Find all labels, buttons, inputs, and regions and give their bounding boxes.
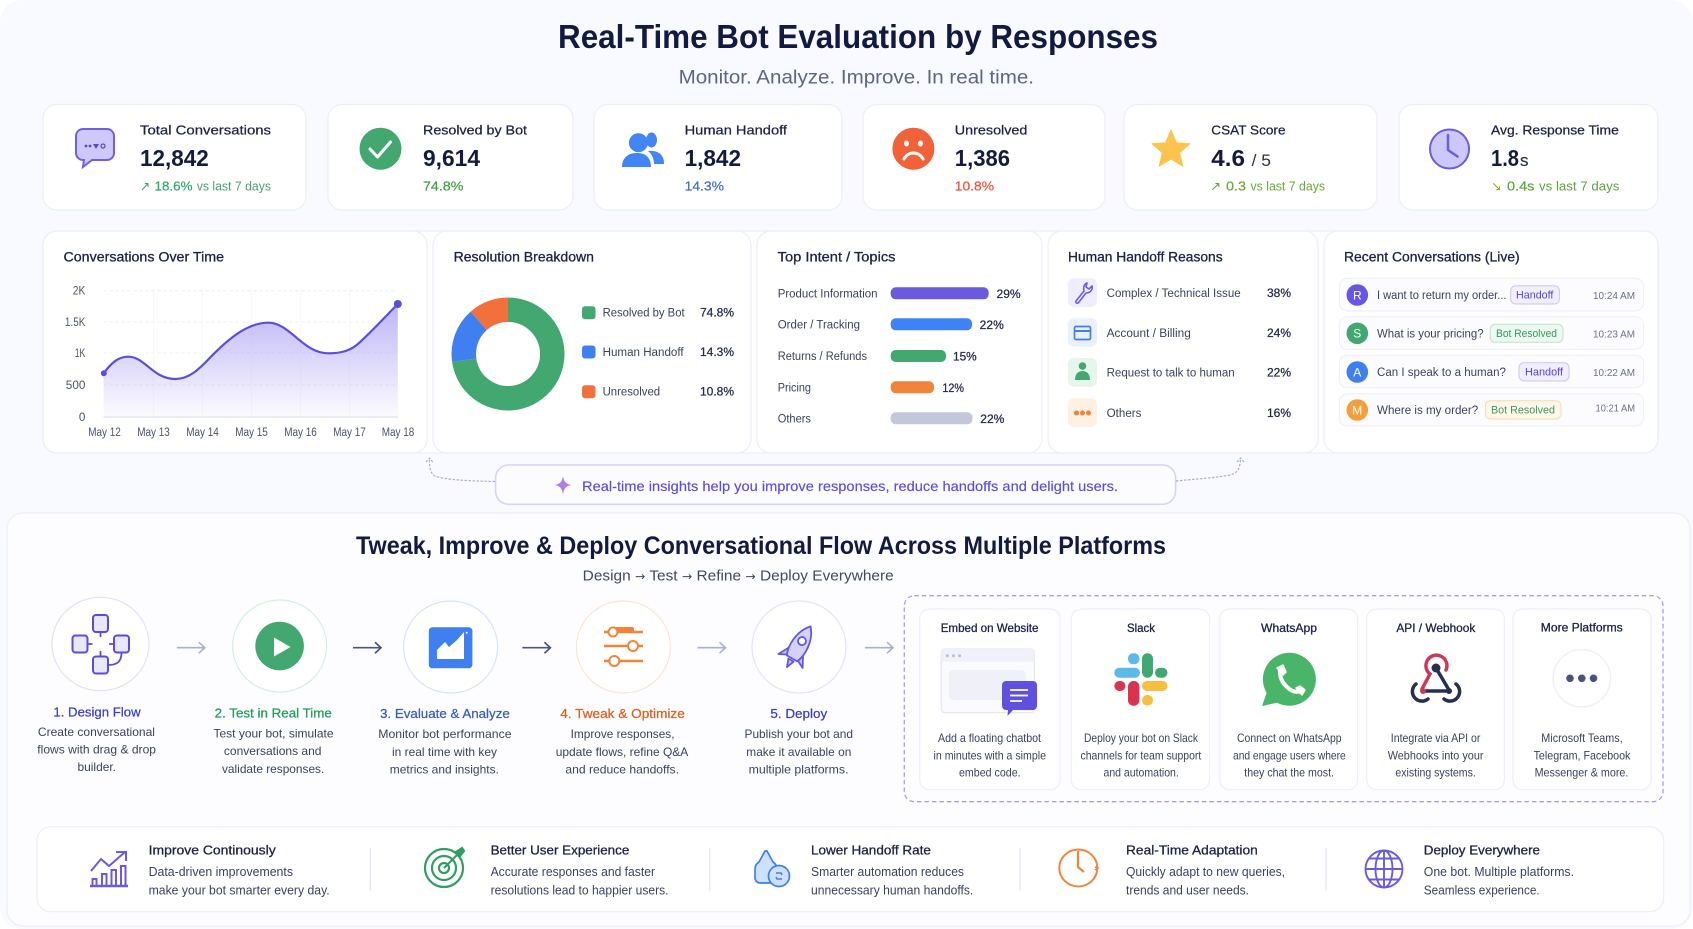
label: CSAT Score: [1211, 122, 1286, 138]
reason: technical: Complex / Technical Issue: [1107, 288, 1241, 300]
trend: ↗: [1210, 178, 1221, 194]
bar chart: Returns / Refunds: [778, 351, 867, 363]
bar chart: 15%: [953, 352, 977, 364]
conversation row 4: M: [1352, 403, 1362, 417]
card description: Webhooks into your: [1388, 748, 1484, 762]
trend: ↘: [1491, 178, 1502, 194]
arrow: callout to right panels: [1176, 458, 1244, 481]
line chart: May 15: [235, 427, 268, 439]
bar chart: Product Information: [778, 288, 878, 300]
line chart: 2K: [73, 286, 86, 298]
conversation row 2: 10:23 AM: [1593, 329, 1635, 341]
callout text: Real-time insights help you improve responses, reduce handoffs and delight users.: [582, 478, 1118, 494]
panel: deployment platforms: [904, 596, 1663, 802]
reason: others: Others: [1107, 408, 1142, 420]
card description: Connect on WhatsApp: [1237, 731, 1342, 745]
bar chart: Order / Tracking: [778, 319, 860, 331]
icon: star: [1152, 130, 1190, 166]
line chart: 0: [79, 412, 85, 424]
icon: sliders: [576, 601, 670, 693]
step description: Improve responses,: [571, 727, 674, 741]
reason: billing: [1068, 318, 1291, 347]
benefit title: Lower Handoff Rate: [811, 842, 931, 858]
legend: Human Handoff: [603, 347, 684, 359]
value: 12,842: [140, 145, 209, 171]
value: 4.6: [1211, 145, 1245, 171]
conversation row 4: [1339, 394, 1644, 426]
arrow: [865, 642, 893, 653]
step description: make it available on: [746, 745, 851, 759]
benefit title: Real-Time Adaptation: [1126, 842, 1258, 858]
reason: technical: [1068, 278, 1291, 307]
heading: Top Intent / Topics: [778, 250, 896, 264]
page title: Real-Time Bot Evaluation by Responses: [558, 18, 1158, 55]
value: 1,386: [955, 145, 1010, 171]
panel: benefits strip: [37, 827, 1664, 912]
step title: 2. Test in Real Time: [215, 706, 332, 721]
reason: technical: 38%: [1267, 288, 1291, 300]
icon: tag with refresh: [755, 851, 790, 886]
step description: [556, 727, 688, 776]
arrow: callout to left panels: [426, 458, 495, 482]
step title: 3. Evaluate & Analyze: [380, 706, 510, 721]
share: 74.8%: [423, 180, 463, 194]
trend: vs last 7 days: [197, 180, 271, 194]
benefit text: [491, 865, 668, 897]
card description: in minutes with a simple: [934, 748, 1046, 762]
value: 1.8: [1491, 145, 1519, 171]
step description: Test your bot, simulate: [214, 726, 334, 740]
step 1: design flow: [37, 597, 156, 774]
trend: ↗: [140, 178, 150, 194]
platform card: slack: [1071, 609, 1210, 790]
label: Human Handoff: [685, 122, 787, 138]
conversation row 1: 10:24 AM: [1593, 290, 1635, 302]
icon: analytics chart: [404, 601, 498, 693]
KPI card: unresolved: [863, 104, 1105, 210]
icon: more dots: [1553, 650, 1611, 707]
legend: 74.8%: [700, 308, 734, 320]
benefit text: [811, 865, 973, 897]
icon: sad face: [892, 128, 934, 170]
line chart: [65, 286, 414, 439]
icon: rocket: [752, 601, 846, 693]
card description: [1534, 731, 1631, 780]
line chart: May 17: [333, 427, 366, 439]
panel: conversations over time: [43, 231, 427, 453]
step 3: evaluate and analyze: [378, 601, 512, 776]
step description: validate responses.: [222, 762, 324, 776]
step description: conversations and: [224, 744, 322, 758]
benefit title: Deploy Everywhere: [1424, 842, 1540, 858]
conversation row 1: [1339, 278, 1644, 311]
label: Total Conversations: [140, 122, 272, 138]
callout: real-time insights: [496, 465, 1176, 504]
line chart: May 13: [137, 427, 170, 439]
icon: sparkle: [554, 476, 572, 494]
step description: metrics and insights.: [390, 762, 499, 776]
conversation row 1: R: [1353, 288, 1362, 302]
value: [1211, 145, 1271, 171]
benefit text: unnecessary human handoffs.: [811, 883, 973, 897]
benefit: better user experience: [425, 842, 668, 897]
benefit text: resolutions lead to happier users.: [491, 883, 668, 897]
bar chart: 22%: [980, 320, 1004, 332]
benefit text: make your bot smarter every day.: [149, 883, 330, 897]
card description: Integrate via API or: [1391, 731, 1480, 745]
conversation row 2: Bot Resolved: [1496, 328, 1557, 340]
reason: human request: Request to talk to human: [1107, 368, 1235, 380]
conversation row 3: [1339, 355, 1644, 388]
benefit: real-time adaptation: [1059, 842, 1285, 897]
label: Avg. Response Time: [1491, 122, 1619, 138]
step description: [214, 726, 334, 776]
reason: human request: [1068, 358, 1291, 387]
KPI card: average response time: [1399, 104, 1658, 210]
step title: 5. Deploy: [770, 706, 828, 721]
step description: Monitor bot performance: [378, 727, 512, 741]
label: Resolved by Bot: [423, 122, 527, 138]
card description: they chat the most.: [1244, 766, 1334, 780]
step description: in real time with key: [392, 745, 497, 759]
card description: existing systems.: [1395, 766, 1476, 780]
card description: [1080, 731, 1202, 780]
benefit title: Improve Continously: [149, 842, 276, 858]
section subtitle: Design → Test → Refine → Deploy Everywhere: [583, 568, 894, 584]
legend: Unresolved: [603, 387, 660, 399]
platform card: whatsapp: [1220, 609, 1358, 790]
benefit: improve continuously: [90, 842, 330, 897]
conversation row 2: [1339, 317, 1644, 349]
KPI card: resolved by bot: [328, 104, 573, 210]
KPI card: human handoff: [594, 104, 842, 210]
reason: billing: Account / Billing: [1107, 328, 1191, 340]
icon: flow diagram: [52, 597, 149, 691]
step 2: test in real time: [214, 600, 334, 776]
heading: Resolution Breakdown: [454, 250, 594, 264]
trend: vs last 7 days: [1539, 180, 1619, 194]
step description: builder.: [78, 760, 116, 774]
card title: WhatsApp: [1261, 621, 1317, 635]
conversation row 1: I want to return my order...: [1377, 290, 1506, 302]
bar chart: 29%: [996, 289, 1021, 301]
step description: [37, 725, 156, 774]
trend: 0.4s: [1507, 180, 1534, 194]
legend: Resolved by Bot: [603, 308, 685, 320]
benefit text: [149, 865, 330, 897]
panel: analytics row: [43, 231, 1658, 453]
section title: Tweak, Improve & Deploy Conversational Flow Across Multiple Platforms: [356, 532, 1166, 560]
icon: target: [425, 848, 464, 887]
step description: [378, 727, 512, 776]
label: Unresolved: [955, 122, 1027, 138]
share: 10.8%: [955, 180, 994, 194]
trend: 18.6%: [154, 180, 192, 194]
card description: [1233, 731, 1346, 780]
icon: webhook: [1412, 655, 1460, 701]
arrow: [353, 642, 381, 653]
platform card: api webhook: [1367, 609, 1504, 790]
panel: top intent topics: [757, 231, 1042, 453]
KPI card: CSAT score: [1124, 104, 1377, 210]
card title: API / Webhook: [1396, 621, 1476, 635]
bar chart: Others: [778, 413, 811, 425]
step description: multiple platforms.: [749, 762, 848, 776]
trend: [1210, 178, 1325, 194]
line chart: May 16: [284, 427, 317, 439]
value: / 5: [1252, 151, 1271, 170]
bar chart: 22%: [980, 414, 1004, 426]
conversation row 3: A: [1353, 365, 1361, 379]
card title: Embed on Website: [941, 621, 1039, 635]
card title: More Platforms: [1541, 620, 1623, 634]
panel: human handoff reasons: [1048, 231, 1318, 453]
card description: and engage users where: [1233, 748, 1346, 762]
step description: Publish your bot and: [744, 727, 853, 741]
conversation row 3: Handoff: [1525, 367, 1564, 379]
reason: others: [1068, 398, 1291, 427]
step description: and reduce handoffs.: [565, 762, 679, 776]
icon: growth chart: [90, 852, 128, 886]
legend: 10.8%: [700, 387, 734, 399]
step description: update flows, refine Q&A: [556, 745, 688, 759]
card description: Add a floating chatbot: [938, 731, 1042, 745]
conversation row 2: S: [1353, 327, 1361, 341]
reason: human request: 22%: [1267, 368, 1291, 380]
reason: others: 16%: [1267, 408, 1291, 420]
heading: Human Handoff Reasons: [1068, 250, 1223, 264]
arrow: [522, 642, 550, 653]
card description: embed code.: [959, 766, 1021, 780]
value: 9,614: [423, 145, 480, 171]
line chart: 1K: [75, 348, 86, 360]
share: 14.3%: [685, 180, 724, 194]
conversation row 2: What is your pricing?: [1377, 328, 1484, 340]
card description: [934, 731, 1046, 780]
heading: Conversations Over Time: [64, 250, 224, 264]
icon: people: [622, 132, 664, 167]
conversation row 4: 10:21 AM: [1596, 403, 1635, 415]
icon: check circle: [360, 128, 402, 170]
trend: 0.3: [1226, 180, 1246, 194]
card description: channels for team support: [1080, 748, 1202, 762]
line chart: May 14: [186, 427, 219, 439]
icon: globe: [1366, 850, 1402, 888]
platform card: embed on website: [920, 609, 1060, 790]
benefit text: Data-driven improvements: [149, 865, 293, 879]
panel: resolution breakdown: [433, 231, 751, 453]
conversation row 3: 10:22 AM: [1593, 367, 1635, 379]
icon: slack logo: [1114, 653, 1168, 706]
benefit text: Quickly adapt to new queries,: [1126, 865, 1285, 879]
card description: Telegram, Facebook: [1534, 748, 1631, 762]
line chart: 500: [66, 380, 85, 392]
icon: whatsapp logo: [1262, 653, 1316, 706]
benefit text: [1126, 865, 1285, 897]
step 4: tweak and optimize: [556, 601, 688, 776]
benefit text: Seamless experience.: [1424, 883, 1540, 897]
subtitle: Monitor. Analyze. Improve. In real time.: [679, 68, 1034, 88]
bar chart: [778, 287, 1021, 426]
line chart: 1.5K: [65, 317, 86, 329]
step title: 1. Design Flow: [53, 704, 141, 720]
card description: Deploy your bot on Slack: [1084, 731, 1199, 745]
benefit text: [1424, 865, 1574, 897]
legend: 14.3%: [700, 347, 734, 359]
trend: vs last 7 days: [1250, 180, 1325, 194]
legend: [582, 306, 734, 399]
heading: Recent Conversations (Live): [1344, 250, 1520, 264]
icon: play button: [233, 600, 327, 692]
KPI card: total conversations: [43, 104, 306, 210]
benefit title: Better User Experience: [491, 842, 629, 858]
card title: Slack: [1127, 621, 1156, 635]
icon: chat bubble: [76, 129, 114, 167]
panel: deploy section: [7, 513, 1690, 926]
step description: Create conversational: [38, 725, 155, 739]
panel: recent conversations: [1324, 231, 1658, 453]
arrow: [177, 642, 205, 653]
bar chart: 12%: [942, 383, 964, 395]
conversation row 4: Bot Resolved: [1491, 405, 1555, 417]
conversation row 3: Can I speak to a human?: [1377, 367, 1506, 379]
trend: [1491, 178, 1619, 194]
benefit text: Accurate responses and faster: [491, 865, 655, 879]
icon: clock: [1430, 130, 1469, 168]
benefit text: Smarter automation reduces: [811, 865, 964, 879]
reason: billing: 24%: [1267, 328, 1291, 340]
card description: [1388, 731, 1484, 780]
icon: orange clock: [1059, 850, 1098, 886]
trend: [140, 178, 271, 194]
card description: and automation.: [1104, 766, 1179, 780]
conversation row 4: Where is my order?: [1377, 405, 1478, 417]
bar chart: Pricing: [778, 382, 811, 394]
card description: Messenger & more.: [1535, 766, 1628, 780]
value: s: [1520, 151, 1528, 170]
line chart: May 18: [382, 427, 414, 439]
step description: [744, 727, 853, 776]
benefit text: trends and user needs.: [1126, 883, 1249, 897]
card description: Microsoft Teams,: [1541, 731, 1623, 745]
benefit text: One bot. Multiple platforms.: [1424, 865, 1574, 879]
arrow: [698, 642, 726, 653]
line chart: May 12: [88, 427, 121, 439]
step title: 4. Tweak & Optimize: [560, 706, 685, 721]
donut chart: [464, 310, 552, 398]
benefit: deploy everywhere: [1366, 842, 1574, 897]
step description: flows with drag & drop: [37, 742, 156, 756]
platform card: more platforms: [1513, 609, 1651, 790]
step 5: deploy: [744, 601, 853, 776]
conversation row 1: Handoff: [1516, 290, 1554, 302]
benefit: lower handoff rate: [755, 842, 973, 897]
value: 1,842: [685, 145, 741, 171]
icon: browser with chat bubble: [941, 649, 1037, 716]
